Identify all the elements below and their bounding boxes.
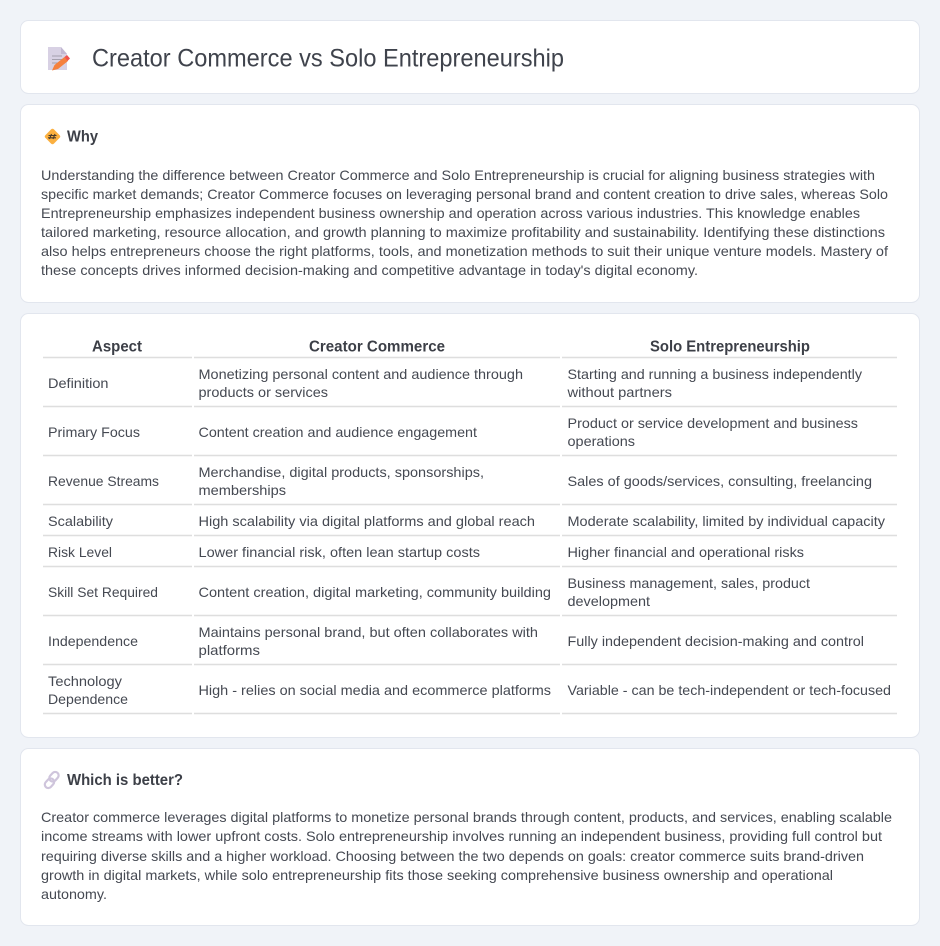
row: scalability: Scalability [48, 513, 113, 529]
panel: comparison table [20, 314, 920, 738]
row: technology dependence: High - relies on social media and ecommerce platforms [198, 682, 551, 698]
row: risk level [43, 544, 897, 566]
text block: why paragraph: Entrepreneurship emphasizes independent business ownership and operation across various industries. This knowledge enables [41, 205, 860, 221]
row: primary focus: Primary Focus [48, 424, 140, 440]
row: definition: Monetizing personal content and audience through [198, 366, 523, 382]
row: skill set required: Business management, sales, product [568, 575, 810, 591]
row: revenue streams: memberships [198, 482, 286, 498]
table header [43, 338, 897, 358]
text block: which is better paragraph [41, 809, 892, 902]
text block: which is better paragraph: income streams with lower upfront costs. Solo entrepreneurship involves running an independent business, providing full control but [41, 828, 882, 844]
icon: orange diamond sign [44, 128, 61, 145]
text block: which is better paragraph: autonomy. [41, 886, 107, 902]
row: skill set required: development [568, 593, 650, 609]
icon: document with pencil [48, 47, 70, 70]
row: definition: without partners [566, 384, 672, 400]
row: primary focus [43, 415, 897, 456]
row: risk level: Higher financial and operational risks [568, 544, 804, 560]
text block: which is better paragraph: requiring diverse skills and a higher workload. Choosing between the two depends on goals: creator commerce suits brand-driven [41, 848, 864, 864]
row: definition: Definition [48, 375, 108, 391]
row: primary focus: operations [568, 433, 635, 449]
row: definition: products or services [198, 384, 328, 400]
text block: why paragraph [41, 167, 888, 278]
row: definition [43, 366, 897, 406]
text block: why paragraph: Understanding the difference between Creator Commerce and Solo Entrepreneurship is crucial for aligning business strategies with [41, 167, 875, 183]
icon: link [43, 770, 60, 789]
row: independence: Independence [48, 633, 138, 649]
panel: why [20, 104, 920, 302]
row: technology dependence: Variable - can be tech-independent or tech-focused [568, 682, 891, 698]
text block: why paragraph: also helps entrepreneurs choose the right platforms, tools, and monetization methods to suit their unique venture models. Mastery of [41, 243, 888, 259]
row: revenue streams: Merchandise, digital products, sponsorships, [198, 464, 484, 480]
row: primary focus: Content creation and audience engagement [198, 424, 477, 440]
panel: which is better [20, 748, 920, 926]
table header: Creator Commerce [309, 338, 445, 356]
row: technology dependence: Dependence [48, 691, 128, 707]
row: revenue streams [43, 464, 897, 504]
row: definition: Starting and running a business independently [568, 366, 862, 382]
row: independence [43, 624, 897, 664]
text block: which is better paragraph: Creator commerce leverages digital platforms to monetize personal brands through content, products, and services, enabling scalable [41, 809, 892, 825]
table header: Aspect [92, 338, 143, 356]
row: risk level: Lower financial risk, often lean startup costs [198, 544, 480, 560]
row: independence: platforms [198, 642, 260, 658]
row: technology dependence [43, 673, 897, 714]
row: scalability [43, 513, 897, 536]
heading: which is better: Which is better? [67, 772, 183, 789]
row: independence: Maintains personal brand, but often collaborates with [198, 624, 538, 640]
row: scalability: Moderate scalability, limited by individual capacity [568, 513, 885, 529]
row: revenue streams: Revenue Streams [48, 473, 159, 489]
panel: title header [20, 20, 920, 94]
table header: Solo Entrepreneurship [650, 338, 810, 356]
row: primary focus: Product or service development and business [568, 415, 858, 431]
text block: why paragraph: specific market demands; Creator Commerce focuses on leveraging personal brand and content creation to drive sales, whereas Solo [41, 186, 888, 202]
row: skill set required [43, 575, 897, 616]
title: Creator Commerce vs Solo Entrepreneurship [92, 44, 564, 72]
row: skill set required: Content creation, digital marketing, community building [198, 584, 551, 600]
row: risk level: Risk Level [48, 544, 112, 560]
row: technology dependence: Technology [48, 673, 122, 689]
heading: why: Why [67, 128, 98, 146]
row: revenue streams: Sales of goods/services, consulting, freelancing [568, 473, 872, 489]
row: skill set required: Skill Set Required [48, 584, 158, 600]
text block: why paragraph: tailored marketing, resource allocation, and growth planning to maximize profitability and sustainability. Identifying these distinctions [41, 224, 885, 240]
row: independence: Fully independent decision-making and control [568, 633, 864, 649]
text block: why paragraph: these concepts drives informed decision-making and competitive advantage in today's digital economy. [41, 262, 698, 278]
row: scalability: High scalability via digital platforms and global reach [198, 513, 535, 529]
text block: which is better paragraph: growth in digital markets, while solo entrepreneurship fits those seeking comprehensive business ownership and operational [41, 867, 833, 883]
